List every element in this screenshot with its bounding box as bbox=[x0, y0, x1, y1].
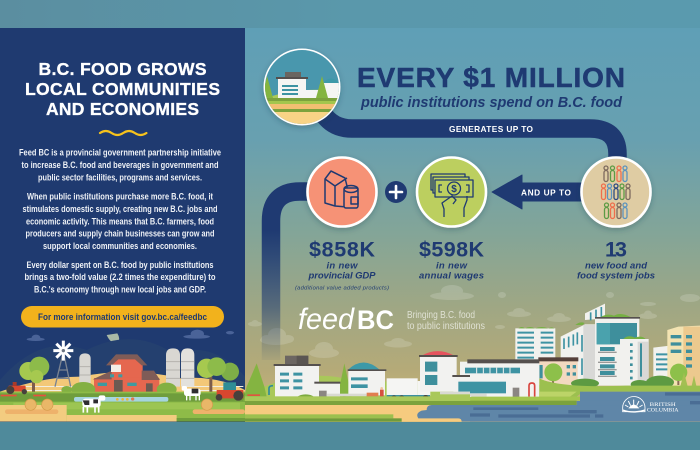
logo: feedBC: BC bbox=[357, 305, 394, 335]
logo: feedBC: Bringing B.C. food bbox=[407, 309, 475, 321]
icon: wages circle with cash and hand bbox=[417, 158, 486, 226]
logo: British Columbia: COLUMBIA bbox=[647, 407, 679, 413]
building: long low continued bbox=[467, 359, 539, 397]
icon: jobs circle with people bbox=[582, 158, 650, 226]
street trees bbox=[544, 363, 697, 390]
arrow: and up to bbox=[492, 175, 585, 209]
connector: top pipe bbox=[322, 112, 618, 170]
icon: wages circle with cash and hand: $ bbox=[451, 184, 457, 195]
tower: back bbox=[585, 304, 605, 320]
stat: GDP: $858K bbox=[309, 238, 375, 262]
tower: left bbox=[515, 327, 555, 362]
body text bbox=[19, 148, 221, 294]
button: more information: For more information visit gov.bc.ca/feedbc bbox=[38, 312, 207, 322]
building: red roof bbox=[419, 351, 458, 392]
flowers bbox=[1, 395, 46, 396]
illustration: institutions and truck, centre bbox=[243, 351, 478, 422]
body text: economic activity. This means that B.C. farmers, food bbox=[26, 216, 214, 226]
panel: sky background bbox=[245, 28, 700, 422]
tractor: left bbox=[6, 382, 27, 394]
logo: feedBC: to public institutions bbox=[407, 320, 485, 332]
logo: British Columbia: BRITISH bbox=[650, 402, 676, 408]
delivery truck bbox=[387, 378, 430, 402]
silos bbox=[79, 348, 194, 387]
yellow wave divider bbox=[100, 131, 146, 135]
tower: small white bbox=[653, 346, 677, 386]
body text: brings a two-fold value (2.2 times the expenditure) to bbox=[24, 272, 216, 282]
clouds: sky bbox=[248, 285, 700, 358]
cow: back bbox=[182, 386, 201, 400]
cow: front bbox=[82, 395, 105, 413]
button: more information bbox=[21, 306, 224, 328]
connector: left pipe bbox=[271, 192, 315, 360]
heading: AND ECONOMIES bbox=[46, 99, 199, 119]
logo: British Columbia bbox=[623, 396, 679, 413]
stat: GDP: provincial GDP bbox=[308, 270, 376, 282]
top band bbox=[0, 0, 700, 28]
illustration: city, right bbox=[467, 304, 700, 422]
tower: glass bbox=[595, 314, 640, 386]
body text: public sector facilities, programs and services. bbox=[38, 172, 202, 182]
connector: top pipe: GENERATES UP TO bbox=[449, 124, 534, 134]
trees and hedges bbox=[19, 356, 239, 392]
icon: plus bbox=[385, 181, 407, 203]
body text: When public institutions purchase more B.C. food, it bbox=[27, 192, 213, 202]
body text: stimulates domestic supply, creating new B.C. jobs and bbox=[22, 204, 218, 214]
stat: wages: $598K bbox=[419, 238, 484, 262]
barn bbox=[93, 354, 160, 392]
ground bbox=[0, 392, 245, 422]
title: EVERY $1 MILLION bbox=[357, 62, 625, 93]
stat: jobs: food system jobs bbox=[577, 270, 655, 282]
stat: wages bbox=[419, 238, 484, 282]
building: long low bbox=[440, 362, 478, 394]
logo: feedBC bbox=[298, 303, 485, 336]
building: dome bbox=[348, 362, 386, 395]
ducks bbox=[116, 397, 134, 401]
hay bales bbox=[25, 399, 213, 410]
stat: GDP bbox=[295, 238, 389, 292]
tower: front bbox=[620, 336, 649, 384]
stat: wages: in new bbox=[436, 260, 468, 272]
tower: cream bbox=[667, 326, 700, 387]
apartment block bbox=[538, 357, 578, 385]
fence and shrubs bbox=[247, 386, 367, 404]
pallets and worker bbox=[367, 387, 384, 402]
body text: B.C.'s economy through new local jobs and GDP. bbox=[34, 284, 206, 294]
stat: jobs: new food and bbox=[585, 260, 647, 272]
panel: left intro bbox=[0, 28, 245, 422]
body text: to increase B.C. food and beverages in government and bbox=[22, 160, 218, 170]
bottom band bbox=[0, 422, 700, 450]
tractor: right bbox=[216, 382, 243, 401]
body text: producers and supply chain businesses can grow and bbox=[26, 228, 214, 238]
building: white institution bbox=[274, 356, 340, 397]
fences bbox=[20, 386, 243, 391]
arrow: and up to: AND UP TO bbox=[521, 188, 572, 198]
stat: jobs: 13 bbox=[605, 238, 627, 262]
body text: Feed BC is a provincial government partnership initiative bbox=[19, 148, 221, 158]
subtitle: public institutions spend on B.C. food bbox=[360, 95, 623, 111]
body text: support local communities and economies. bbox=[43, 241, 197, 251]
heading: LOCAL COMMUNITIES bbox=[25, 79, 220, 99]
illustration: farm bbox=[0, 330, 245, 422]
ground and river bbox=[470, 378, 700, 422]
body text: Every dollar spent on B.C. food by public institutions bbox=[26, 260, 214, 270]
pine trees bbox=[243, 363, 352, 401]
logo: feedBC: feed bbox=[298, 303, 355, 336]
stat: jobs bbox=[577, 238, 655, 282]
ground: left bbox=[245, 396, 475, 422]
tower: curved bbox=[561, 322, 595, 386]
stat: GDP: in new bbox=[326, 260, 358, 272]
stat: wages: annual wages bbox=[419, 270, 484, 282]
heading bbox=[25, 59, 220, 119]
icon: institution circle bbox=[260, 45, 345, 129]
icon: GDP circle with carton and can bbox=[308, 158, 376, 226]
heading: B.C. FOOD GROWS bbox=[38, 59, 206, 79]
clouds and moon bbox=[26, 330, 234, 342]
stat: GDP: (additional value added products) bbox=[295, 286, 389, 292]
windmill bbox=[53, 341, 73, 387]
